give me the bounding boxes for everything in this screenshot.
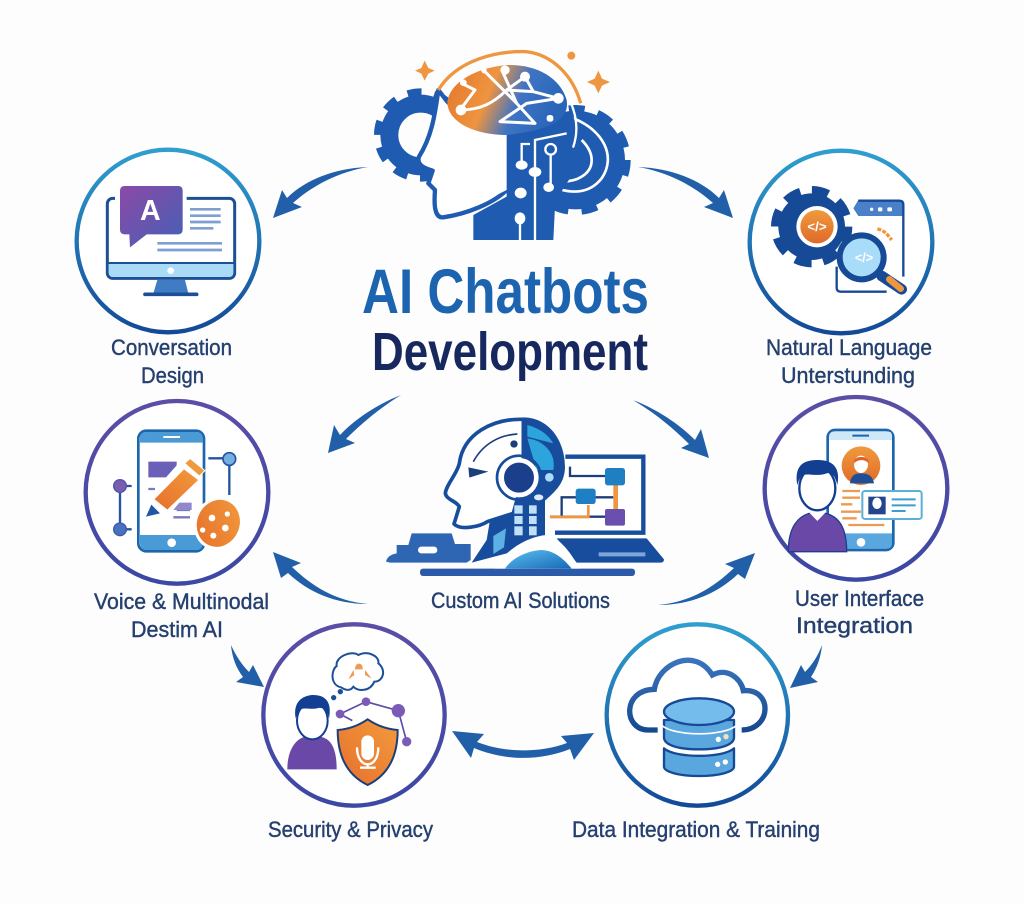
panel: security and privacy [263,624,445,842]
label: Security & Privacy [268,817,433,842]
icon: cloud and database [607,624,788,806]
label: Natural Language [766,335,932,360]
arrow: voice label to security [231,645,264,687]
face [418,90,507,217]
icon: phone, pencil and cookie [86,401,268,584]
label: Destim AI [131,617,223,642]
icon: gear, code window and magnifier [750,151,932,333]
left gear [378,92,463,178]
arrow: head to natural language [638,167,733,218]
circuit traces [520,133,567,240]
sparkles [415,52,610,93]
label: Voice & Multinodal [94,589,269,614]
label [766,335,932,388]
top head arc [438,52,581,103]
head back [472,417,565,563]
shoulder outline [495,535,579,569]
label: Data Integration & Training [572,817,820,842]
arrow: user interface label to data [790,645,822,688]
label: Integration [796,613,913,638]
brain [447,65,567,135]
panel: conversation design [77,150,259,388]
panel: user interface integration [765,397,947,638]
panel: natural language understanding [750,151,932,388]
keyboard block [386,533,471,563]
face [445,419,523,528]
arrow: head to conversation design [273,167,368,218]
neck grid [514,505,537,535]
arrow: center to voice and multimodal [328,395,401,453]
right gear [524,108,627,212]
back panels [527,425,554,470]
base bar [420,569,635,576]
label: User Interface [795,586,924,611]
label [111,335,232,388]
arrow: custom solutions to user interface circle [658,553,755,605]
headset [502,460,536,495]
panel: voice and multimodal [86,401,269,642]
head back and neck [473,117,577,240]
laptop [555,457,643,533]
label [94,589,269,642]
arrow: custom solutions to voice circle [273,552,368,604]
label: Unterstunding [781,363,915,388]
title [362,257,649,382]
icon: gear, code window and magnifier: </> [807,219,827,234]
icon: person, thought bubble and shield [263,624,445,806]
icon: AI head with brain and gears [378,52,627,240]
icon: robot head with headset and laptop [386,417,664,576]
label [795,586,924,638]
icon: monitor with chat bubble [77,150,259,332]
icon: person, phone and ID card [765,397,947,580]
panel: custom AI solutions [386,417,664,613]
title line one: AI Chatbots [362,257,649,327]
arrow: security and data double arrow [452,731,594,760]
panel: data integration and training [572,624,820,842]
icon: monitor with chat bubble: A [140,195,161,227]
arrow: center to user interface [633,400,709,458]
label: Design [141,363,204,388]
title line two: Development [372,322,648,382]
shoulder mound [505,550,572,569]
label: Custom AI Solutions [431,588,610,613]
label: Conversation [111,335,232,360]
icon: gear, code window and magnifier: </> [855,251,873,265]
brain network [460,67,576,147]
